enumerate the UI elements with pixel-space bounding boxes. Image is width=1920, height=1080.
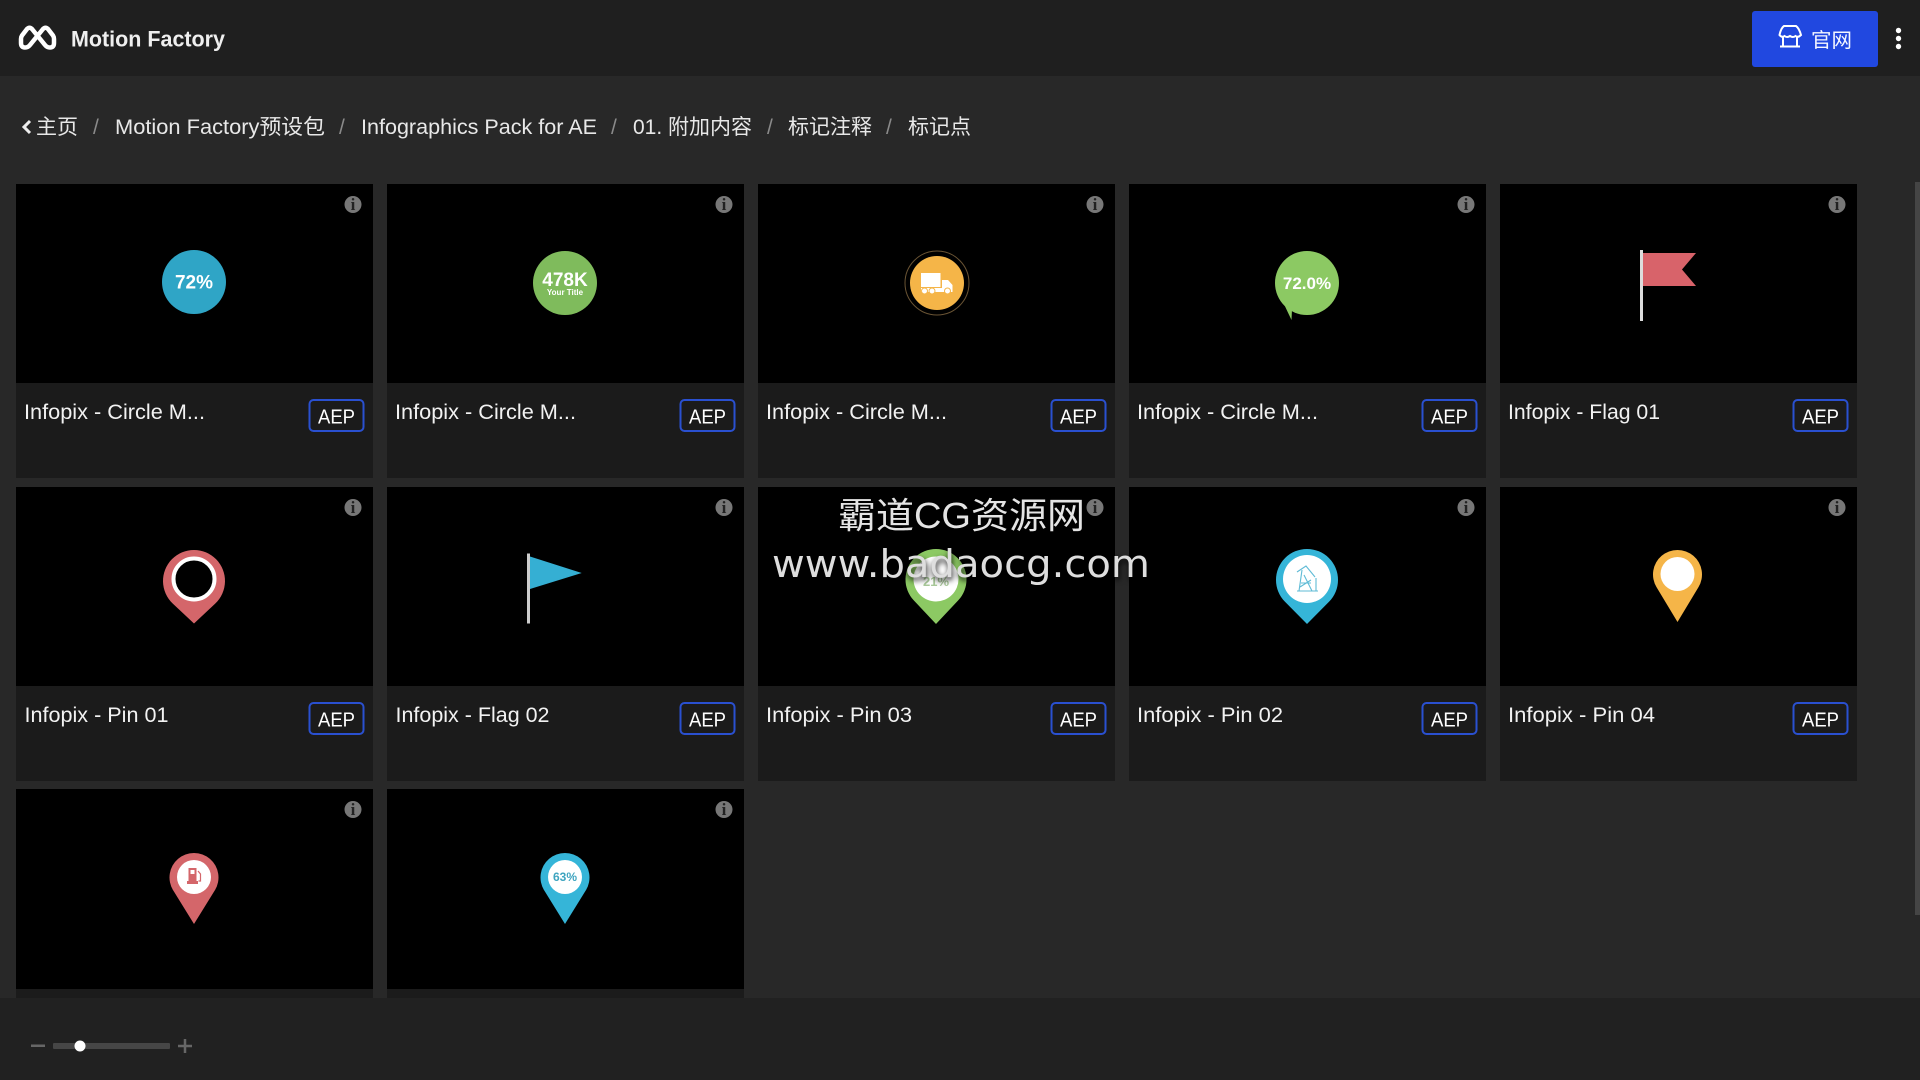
- button: official site: [1752, 11, 1878, 67]
- card title: Infopix - Flag 02: [396, 704, 550, 727]
- card: Pin 02: [1129, 487, 1486, 781]
- icon: info: i: [1464, 498, 1469, 517]
- AEP badge: AEP: [318, 406, 355, 428]
- AEP badge: [1422, 703, 1476, 734]
- breadcrumb: Infographics Pack for AE: [361, 116, 597, 139]
- breadcrumb: [24, 116, 971, 139]
- AEP badge: AEP: [1802, 406, 1839, 428]
- icon: info: [1458, 195, 1474, 214]
- marker: green circle: 478K: [542, 270, 588, 291]
- icon: info: i: [722, 498, 727, 517]
- marker: blue pin 63%: [540, 853, 590, 924]
- card: Flag 01: [1500, 184, 1857, 478]
- marker: green pin: [905, 549, 966, 624]
- AEP badge: [1794, 703, 1848, 734]
- icon: info: [716, 195, 732, 214]
- marker: blue flag: [527, 554, 582, 624]
- marker: red pin with fuel pump: [170, 853, 218, 924]
- AEP badge: AEP: [1431, 710, 1468, 732]
- card: Pin 04: [1500, 487, 1857, 781]
- AEP badge: [1052, 400, 1106, 431]
- marker: green speech bubble: [1275, 251, 1339, 320]
- card: fuel pin: [16, 789, 373, 998]
- icon: info: i: [351, 800, 356, 819]
- card title: Infopix - Circle M...: [24, 401, 205, 424]
- icon: Motion Factory logo: [21, 28, 54, 48]
- icon: info: [1086, 498, 1104, 517]
- AEP badge: [1794, 400, 1848, 431]
- marker: green speech bubble: 72.0%: [1283, 274, 1331, 293]
- icon: info: [344, 498, 362, 517]
- AEP badge: AEP: [1802, 710, 1839, 732]
- AEP badge: AEP: [1060, 710, 1097, 732]
- icon: info: i: [351, 498, 356, 517]
- icon: info: i: [1835, 498, 1840, 517]
- AEP badge: AEP: [1431, 406, 1468, 428]
- AEP badge: [1052, 703, 1106, 734]
- card title: Infopix - Circle M...: [1137, 401, 1318, 424]
- breadcrumb: /: [611, 116, 617, 139]
- icon: info: [344, 800, 362, 819]
- AEP badge: AEP: [689, 406, 726, 428]
- icon: info: i: [1093, 195, 1098, 214]
- scrollbar: [1915, 182, 1920, 915]
- card: Pin 03: [758, 487, 1115, 781]
- marker: blue circle: [162, 250, 226, 314]
- breadcrumb: /: [93, 116, 99, 139]
- marker: red ring pin: [163, 550, 225, 624]
- icon: plus: [178, 1039, 192, 1053]
- icon: info: i: [1464, 195, 1469, 214]
- icon: info: [1828, 498, 1846, 517]
- breadcrumb: /: [886, 116, 892, 139]
- marker: red flag: [1640, 250, 1696, 321]
- card title: Infopix - Circle M...: [766, 401, 947, 424]
- icon: info: i: [1835, 195, 1840, 214]
- card: Circle Marker speech bubble: [1129, 184, 1486, 478]
- card title: Infopix - Pin 04: [1508, 704, 1655, 727]
- breadcrumb: 标记点: [908, 116, 971, 139]
- icon: info: i: [722, 195, 727, 214]
- breadcrumb: 标记注释: [788, 116, 872, 139]
- marker: green pin: 21%: [923, 574, 949, 589]
- button label: 官网: [1811, 29, 1852, 52]
- footer bar with zoom slider: [0, 998, 1920, 1080]
- icon: info: [344, 195, 362, 214]
- marker: green circle: Your Title: [547, 288, 584, 297]
- icon: info: i: [351, 195, 356, 214]
- card title: Infopix - Pin 03: [766, 704, 912, 727]
- slider: [53, 1040, 170, 1052]
- card title: Infopix - Pin 01: [24, 704, 169, 727]
- marker: orange circle with truck: [905, 251, 969, 315]
- breadcrumb: /: [767, 116, 773, 139]
- breadcrumb: 主页: [36, 116, 78, 139]
- icon: info: [1828, 195, 1846, 214]
- watermark: [772, 495, 1150, 586]
- card: Circle Marker 72%: [16, 184, 373, 478]
- card: Circle Marker truck: [758, 184, 1115, 478]
- marker: blue pin with pumpjack: [1276, 549, 1338, 624]
- AEP badge: [310, 400, 364, 431]
- breadcrumb: /: [339, 116, 345, 139]
- watermark: www.badaocg.com: [772, 542, 1150, 586]
- marker: orange pin: [1653, 550, 1702, 622]
- AEP badge: AEP: [1060, 406, 1097, 428]
- AEP badge: AEP: [689, 710, 726, 732]
- AEP badge: [310, 703, 364, 734]
- icon: minus: [31, 1044, 45, 1047]
- marker: blue pin 63%: 63%: [553, 870, 577, 884]
- AEP badge: [680, 703, 734, 734]
- card: 63% pin: [387, 789, 744, 998]
- header bar: [0, 0, 1920, 76]
- marker: blue circle: 72%: [175, 272, 213, 294]
- AEP badge: AEP: [318, 710, 355, 732]
- icon: info: i: [1093, 498, 1098, 517]
- card: Pin 01: [16, 487, 373, 781]
- icon: info: [1458, 498, 1474, 517]
- card title: Infopix - Circle M...: [395, 401, 576, 424]
- icon: info: [716, 498, 732, 517]
- card title: Infopix - Flag 01: [1508, 401, 1660, 424]
- card title: Infopix - Pin 02: [1137, 704, 1283, 727]
- brand name: Motion Factory: [71, 26, 226, 52]
- breadcrumb: 01. 附加内容: [633, 116, 752, 139]
- watermark: 霸道CG资源网: [838, 495, 1085, 536]
- card: Circle Marker 478K: [387, 184, 744, 478]
- icon: store: [1780, 26, 1801, 46]
- card: Flag 02: [387, 487, 744, 781]
- icon: info: [716, 800, 732, 819]
- AEP badge: [680, 400, 734, 431]
- AEP badge: [1422, 400, 1476, 431]
- icon: info: [1086, 195, 1104, 214]
- marker: green circle: [533, 251, 597, 315]
- breadcrumb: Motion Factory预设包: [115, 116, 325, 139]
- icon: more menu: [1896, 28, 1901, 49]
- icon: info: i: [722, 800, 727, 819]
